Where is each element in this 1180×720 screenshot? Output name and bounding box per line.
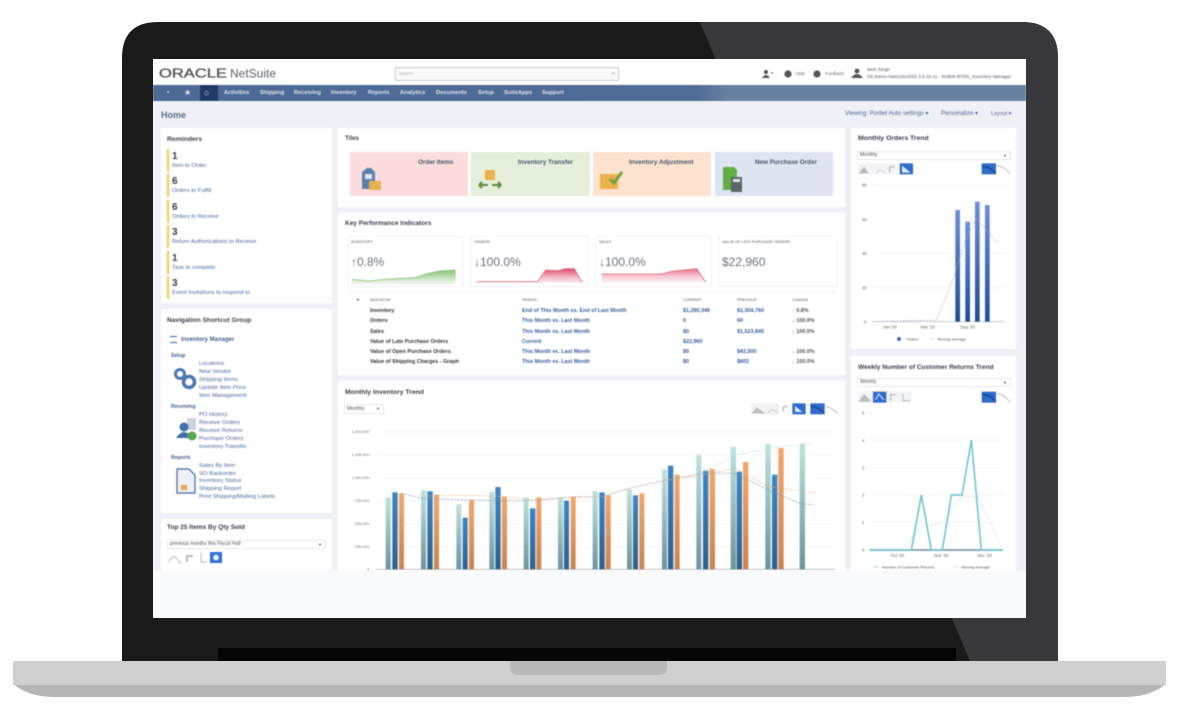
table header: PERIOD: [522, 298, 537, 302]
table rows: ↓ 100.0%: [792, 318, 814, 324]
table rows: Value of Open Purchase Orders: [370, 349, 451, 355]
nav menu: Support: [542, 90, 564, 96]
logo: [158, 66, 276, 80]
tile: inventory adjustment: Inventory Adjustment: [629, 159, 694, 166]
returns trend heading: Weekly Number of Customer Returns Trend: [858, 364, 994, 371]
y axis and grid: 1,500,000: [352, 429, 370, 434]
panel: monthly orders trend: [851, 128, 1016, 349]
table rows: $1,280,346: [683, 308, 710, 314]
user tools: [762, 67, 1012, 80]
nav menu: Activities: [224, 90, 249, 96]
reports links: Sales By Item: [199, 463, 235, 469]
navigation bar: [153, 85, 1026, 101]
table rows: $0: [683, 349, 689, 355]
bar chart: monthly inventory: [352, 402, 838, 572]
panel: reminders: [161, 128, 332, 303]
table rows: 60: [737, 318, 743, 324]
grid and axis labels: [862, 183, 1005, 329]
period select: [857, 378, 1011, 387]
setup links: Item Management: [199, 393, 246, 399]
receiving links: Inventory Transfer: [199, 444, 246, 450]
reports links: Shipping Report: [199, 486, 241, 492]
top bar: [153, 66, 1026, 102]
period select: Monthly: [860, 152, 878, 158]
period select: ▼: [318, 542, 322, 547]
icon: help: [784, 70, 792, 78]
grid and axis labels: 2: [862, 493, 865, 498]
grid and axis labels: 40: [862, 251, 867, 256]
period select: ▼: [1003, 380, 1007, 385]
grid and axis labels: 0: [864, 319, 867, 324]
receiving links: Receive Orders: [199, 420, 240, 426]
tile: inventory transfer: [471, 152, 590, 196]
y axis and grid: 250,000: [355, 544, 370, 549]
icon: calculator document: [722, 166, 743, 193]
icon: adjustment check: [599, 170, 624, 190]
panel: navigation shortcut group: [161, 309, 332, 513]
page actions: [844, 110, 1012, 118]
bars: [955, 202, 990, 322]
help link: Help: [796, 71, 805, 76]
receiving links: PO History: [199, 412, 227, 418]
grid and axis labels: Mar '20: [921, 324, 936, 329]
moving average line: [873, 218, 1000, 322]
icon: clipboard box: [361, 167, 382, 191]
table rows: ↓ 100.0%: [792, 349, 814, 355]
screen: [153, 59, 1026, 618]
page title: Home: [161, 110, 186, 120]
bar chart: monthly orders: [858, 162, 1010, 342]
nav menu: [224, 89, 564, 96]
kpi: sales: [595, 236, 712, 287]
reminder list: 1: [172, 150, 178, 162]
panel: top 25 items: [161, 519, 332, 571]
grid and axis labels: 5: [862, 410, 865, 415]
reports links: SO Backorder: [199, 470, 236, 476]
reminder list: Item to Order: [172, 163, 206, 169]
reminder list: 6: [172, 176, 178, 186]
nav menu: SuiteApps: [504, 90, 532, 96]
line chart: weekly returns: [858, 390, 1010, 570]
reminder list: Return Authorizations to Receive: [172, 239, 256, 245]
panel: weekly customer returns trend: [851, 356, 1016, 571]
setup links: Shipping Items: [199, 377, 238, 383]
table rows: $0: [683, 359, 689, 365]
nav menu: Reports: [368, 90, 390, 96]
page actions: Personalize ▾: [941, 110, 978, 116]
chart legend: Number of Customer Returns: [882, 564, 934, 569]
tile: new purchase order: [715, 152, 833, 196]
table rows: This Month vs. Last Month: [522, 349, 590, 355]
table rule: [347, 292, 838, 293]
reminder list: 6: [172, 202, 178, 212]
table header: ▼: [356, 297, 360, 302]
chart legend: Moving average: [937, 336, 967, 341]
kpi: orders: ORDERS: [474, 240, 490, 244]
nav icons: ⌂: [204, 88, 209, 97]
table rows: ↑ 0.8%: [792, 308, 808, 314]
table rows: This Month vs. Last Month: [522, 329, 590, 335]
tile: order items: [350, 152, 468, 196]
returns line: [870, 440, 1003, 550]
setup links: [198, 360, 247, 399]
inventory manager link: Inventory Manager: [181, 337, 234, 343]
grid and axis labels: [862, 410, 1003, 558]
kpi: inventory: INVENTORY: [351, 240, 373, 244]
table rows: Orders: [370, 318, 388, 324]
icon: menu: [170, 336, 177, 343]
table rows: $0: [683, 329, 689, 335]
reminder list: Event Invitations to respond to: [172, 290, 250, 296]
grid and axis labels: 3: [862, 465, 865, 470]
kpi: value of late purchase orders: VALUE OF LATE PURCHASE ORDERS: [722, 240, 790, 244]
period select: previous months this Fiscal Half: [170, 541, 241, 547]
table rows: $42,500: [737, 349, 756, 355]
kpi heading: Key Performance Indicators: [345, 220, 431, 227]
nav menu: Receiving: [294, 90, 321, 96]
chart toolbar: [751, 403, 838, 414]
table header: CURRENT: [683, 298, 702, 302]
kpi table: [348, 292, 838, 365]
table rows: [370, 307, 816, 365]
nav icons: ★: [184, 88, 191, 97]
y axis and grid: 500,000: [355, 521, 370, 526]
tile: inventory transfer: Inventory Transfer: [518, 159, 573, 166]
period select: ▼: [1003, 153, 1007, 158]
receiving links: [198, 411, 247, 450]
tiles heading: Tiles: [345, 135, 359, 142]
icon: user role: [850, 68, 864, 79]
reminder list: Orders to Fulfill: [172, 188, 211, 194]
icon: gears: [173, 367, 197, 390]
table rows: This Month vs. Last Month: [522, 318, 590, 324]
table rows: $602: [737, 359, 749, 365]
chart legend: [897, 336, 967, 341]
table header: INDICATOR: [370, 298, 391, 302]
period select: [344, 404, 384, 414]
icon: report document: [176, 468, 196, 494]
kpi: sales: SALES: [599, 240, 611, 244]
nav menu: Documents: [436, 90, 467, 96]
receiving links: Receive Returns: [199, 428, 243, 434]
search box: ⌕: [612, 71, 615, 77]
laptop lid: [122, 22, 1058, 661]
table rows: $22,960: [683, 339, 702, 345]
orders trend heading: Monthly Orders Trend: [858, 135, 929, 142]
setup links: Locations: [199, 361, 224, 367]
table rows: Inventory: [370, 308, 394, 314]
kpi: orders: ↓100.0%: [474, 255, 521, 269]
table rows: $1,304,760: [737, 308, 764, 314]
tile: order items: Order Items: [418, 159, 453, 166]
grid and axis labels: Sep '20: [960, 324, 975, 329]
icon: add user: [762, 69, 774, 79]
top bar background: [153, 59, 1026, 85]
table rows: Current: [522, 339, 541, 345]
logo: NetSuite: [230, 68, 276, 80]
reminder list: [166, 148, 257, 300]
receiving links: Purchase Orders: [199, 436, 244, 442]
user name: Nick Singh: [867, 68, 890, 73]
y axis and grid: 0: [367, 567, 370, 572]
grid and axis labels: 0: [862, 548, 865, 553]
table header: CHANGE: [792, 298, 808, 302]
setup heading: Setup: [171, 353, 185, 359]
grid and axis labels: Jan '20: [883, 324, 897, 329]
table rows: Value of Late Purchase Orders: [370, 339, 448, 345]
setup links: New Vendor: [199, 369, 231, 375]
grid and axis labels: Oct '20: [891, 553, 905, 558]
reports links: Inventory Status: [199, 478, 242, 484]
chart legend: [873, 564, 991, 569]
page actions: Layout ▾: [991, 110, 1011, 116]
table rows: Value of Shipping Charges - Graph: [370, 359, 459, 365]
table rows: 0: [683, 318, 686, 324]
moving average lines: [402, 443, 817, 505]
kpi: sales: ↓100.0%: [599, 255, 646, 269]
setup links: Update Item Price: [199, 385, 246, 391]
nav icons: ◔: [165, 88, 170, 97]
logo: ORACLE: [159, 66, 227, 80]
top 25 heading: Top 25 Items By Qty Sold: [167, 524, 245, 531]
tile: new purchase order: New Purchase Order: [755, 159, 817, 166]
panel: tiles: [338, 128, 845, 207]
icon: transfer box: [478, 169, 502, 190]
grid and axis labels: Dec '20: [977, 553, 992, 558]
nav menu: Analytics: [400, 90, 425, 96]
nav icons: [165, 88, 210, 97]
user role text: SS Demo NetSuite2020.3.8.15 v1 - NSBW BTDS_Inventory Manager: [867, 74, 1011, 79]
icon: users receiving: [176, 418, 198, 442]
kpi: orders: [470, 236, 588, 287]
chart toolbar: [858, 163, 1010, 174]
page actions: Viewing: Portlet Auto settings ▾: [845, 110, 929, 116]
grid and axis labels: Nov '20: [934, 553, 949, 558]
receiving heading: Receiving: [171, 404, 196, 410]
y axis and grid: [352, 429, 835, 572]
reports links: [198, 462, 276, 500]
panel: monthly inventory trend: [338, 381, 845, 571]
kpi: inventory: ↑0.8%: [351, 255, 384, 269]
table header: PREVIOUS: [737, 298, 757, 302]
kpi: inventory: [347, 236, 463, 287]
y axis and grid: 750,000: [355, 498, 370, 503]
home tab: [200, 85, 218, 101]
period select: Weekly: [860, 379, 876, 385]
grid and axis labels: 4: [862, 438, 865, 443]
grid and axis labels: 60: [862, 217, 867, 222]
feedback link: Feedback: [825, 71, 844, 76]
table rows: ↓ 100.0%: [792, 359, 814, 365]
bars: [386, 443, 805, 569]
kpi: value of late purchase orders: $22,960: [722, 255, 765, 269]
kpi sparklines: [351, 268, 706, 284]
moving average line: [905, 497, 1001, 547]
search box: [395, 67, 619, 81]
table header: [356, 297, 808, 302]
chart toolbar: [858, 392, 1010, 403]
icon: feedback: [812, 70, 822, 78]
reminder list: 1: [172, 252, 178, 264]
chart type buttons: [168, 551, 223, 564]
reports links: Print Shipping/Mailing Labels: [199, 494, 275, 500]
nav menu: Setup: [478, 90, 494, 96]
period select: [857, 151, 1011, 160]
grid and axis labels: 1: [862, 520, 865, 525]
chart legend: Moving Average: [961, 564, 991, 569]
period select: Monthly: [347, 406, 365, 412]
period select: [167, 540, 326, 549]
navigation heading: Navigation Shortcut Group: [167, 317, 251, 324]
grid and axis labels: 20: [862, 285, 867, 290]
kpi: value of late purchase orders: [718, 236, 838, 287]
reports heading: Reports: [171, 455, 191, 461]
reminder list: Task to complete: [172, 265, 216, 271]
y axis and grid: 1,250,000: [352, 452, 370, 457]
chart legend: Orders: [906, 336, 918, 341]
table rows: ↓ 100.0%: [792, 329, 814, 335]
search box: Search: [399, 71, 413, 76]
reminder list: 3: [172, 226, 178, 238]
tile: inventory adjustment: [593, 152, 711, 196]
inventory trend heading: Monthly Inventory Trend: [345, 389, 424, 396]
grid and axis labels: 80: [862, 183, 867, 188]
page background: [153, 101, 1026, 571]
reminder list: 3: [172, 278, 178, 288]
panel: key performance indicators: [338, 213, 845, 375]
table rows: $1,523,845: [737, 329, 764, 335]
table rows: End of This Month vs. End of Last Month: [522, 308, 627, 314]
reminders heading: Reminders: [167, 136, 202, 143]
table rows: This Month vs. Last Month: [522, 359, 590, 365]
nav menu: Shipping: [260, 90, 284, 96]
table rows: Sales: [370, 329, 384, 335]
y axis and grid: 1,000,000: [352, 475, 370, 480]
nav menu: Inventory: [331, 90, 357, 96]
period select: ▼: [376, 406, 380, 411]
reminder list: Orders to Receive: [172, 214, 219, 220]
